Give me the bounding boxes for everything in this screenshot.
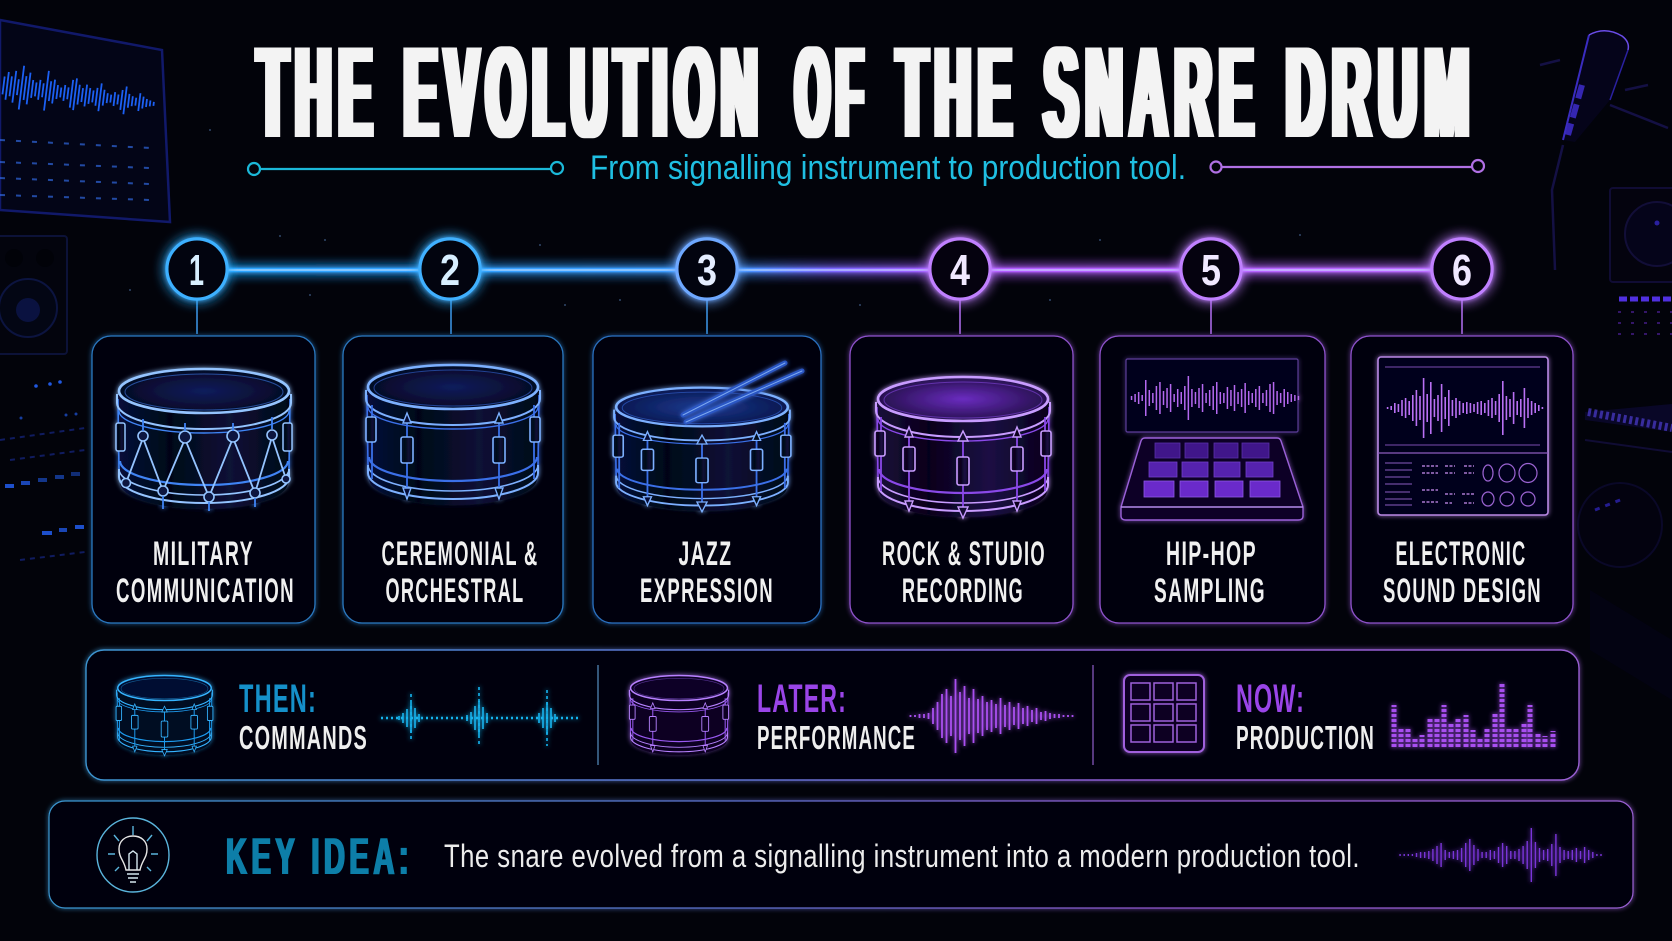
now block: PRODUCTION — [1236, 719, 1375, 756]
label — [1383, 535, 1542, 610]
background keyboard — [1585, 404, 1672, 452]
panel: electronic sound design — [1351, 336, 1573, 623]
step 4 — [930, 239, 990, 299]
then block — [239, 677, 368, 756]
step 5 — [1181, 239, 1241, 299]
key idea heading: KEY IDEA: — [226, 828, 413, 886]
icon: pad grid — [1124, 675, 1204, 752]
subtitle ornament right — [1210, 160, 1484, 172]
sound wave — [1388, 378, 1542, 438]
step 3: 3 — [697, 246, 717, 295]
label: ROCK & STUDIO — [882, 535, 1046, 573]
title: EVOLUTION — [404, 19, 765, 165]
background: studio gear left — [0, 20, 170, 560]
background lower right gear — [1590, 590, 1672, 700]
icon: purple drum — [629, 675, 729, 755]
then block: THEN: — [239, 677, 317, 721]
waveform: pulses — [381, 687, 578, 746]
label — [116, 535, 295, 610]
step 1: 1 — [189, 246, 204, 295]
label: JAZZ — [678, 535, 732, 573]
step 6: 6 — [1452, 246, 1472, 295]
controls — [1385, 463, 1412, 505]
label — [882, 535, 1046, 610]
software window — [1378, 357, 1548, 515]
title: THE — [258, 19, 380, 165]
now block — [1236, 677, 1375, 756]
label: ORCHESTRAL — [386, 572, 524, 610]
label — [1154, 535, 1266, 610]
timeline line — [197, 268, 1462, 272]
label: SOUND DESIGN — [1383, 572, 1542, 610]
step 2 — [420, 239, 480, 299]
icon: blue drum — [116, 675, 213, 756]
background microphone — [1540, 31, 1668, 270]
waveform monitor — [1126, 359, 1298, 432]
background controller — [1618, 299, 1672, 334]
background: studio gear right — [1540, 31, 1672, 700]
label: HIP-HOP — [1166, 535, 1257, 573]
label: MILITARY — [153, 535, 254, 573]
then block: COMMANDS — [239, 719, 368, 756]
label — [640, 535, 774, 610]
star specks — [129, 129, 1301, 306]
later block: LATER: — [757, 677, 847, 721]
subtitle: From signalling instrument to production tool. — [590, 149, 1186, 187]
key idea sentence: The snare evolved from a signalling instrument into a modern production tool. — [444, 838, 1360, 874]
title: SNARE — [1044, 19, 1261, 165]
drum: orchestral snare — [366, 365, 540, 505]
now block: NOW: — [1236, 677, 1305, 721]
panel: ceremonial and orchestral — [343, 336, 563, 623]
title: THE — [897, 19, 1019, 165]
panel: jazz expression — [593, 336, 821, 623]
step 2: 2 — [440, 246, 460, 295]
panel: key idea — [49, 801, 1633, 908]
chart: level bars — [1394, 683, 1553, 747]
label: EXPRESSION — [640, 572, 774, 610]
background mixer left — [0, 380, 85, 560]
step 5: 5 — [1201, 246, 1221, 295]
step connectors — [197, 300, 707, 334]
step 3 — [677, 239, 737, 299]
background speaker — [1610, 188, 1672, 282]
drumsticks — [683, 363, 802, 422]
label: ELECTRONIC — [1396, 535, 1526, 573]
step 1 — [167, 239, 227, 299]
drum: rope tension — [116, 369, 292, 511]
drum: jazz snare — [613, 388, 791, 512]
label — [382, 535, 538, 610]
waveform: performance — [910, 679, 1072, 753]
background monitor — [0, 20, 170, 222]
panel: hip-hop sampling — [1100, 336, 1325, 623]
label: SAMPLING — [1154, 572, 1266, 610]
icon: light bulb — [97, 818, 169, 892]
drum: rock snare — [875, 377, 1051, 518]
label: CEREMONIAL & — [382, 535, 538, 573]
later block — [757, 677, 916, 756]
panel: military communication — [92, 336, 315, 623]
label: COMMUNICATION — [116, 572, 295, 610]
waveform: key idea — [1400, 828, 1601, 882]
title: OF — [796, 19, 870, 165]
step 6 — [1432, 239, 1492, 299]
step 4: 4 — [950, 246, 970, 295]
subtitle ornament left — [248, 162, 563, 175]
drum pad controller — [1121, 438, 1303, 520]
label: RECORDING — [902, 572, 1024, 610]
later block: PERFORMANCE — [757, 719, 916, 756]
panel: then later now — [86, 650, 1579, 780]
timeline — [167, 239, 1492, 334]
panel: rock and studio recording — [850, 336, 1073, 623]
background speaker — [0, 236, 67, 354]
background knob — [1578, 483, 1662, 567]
